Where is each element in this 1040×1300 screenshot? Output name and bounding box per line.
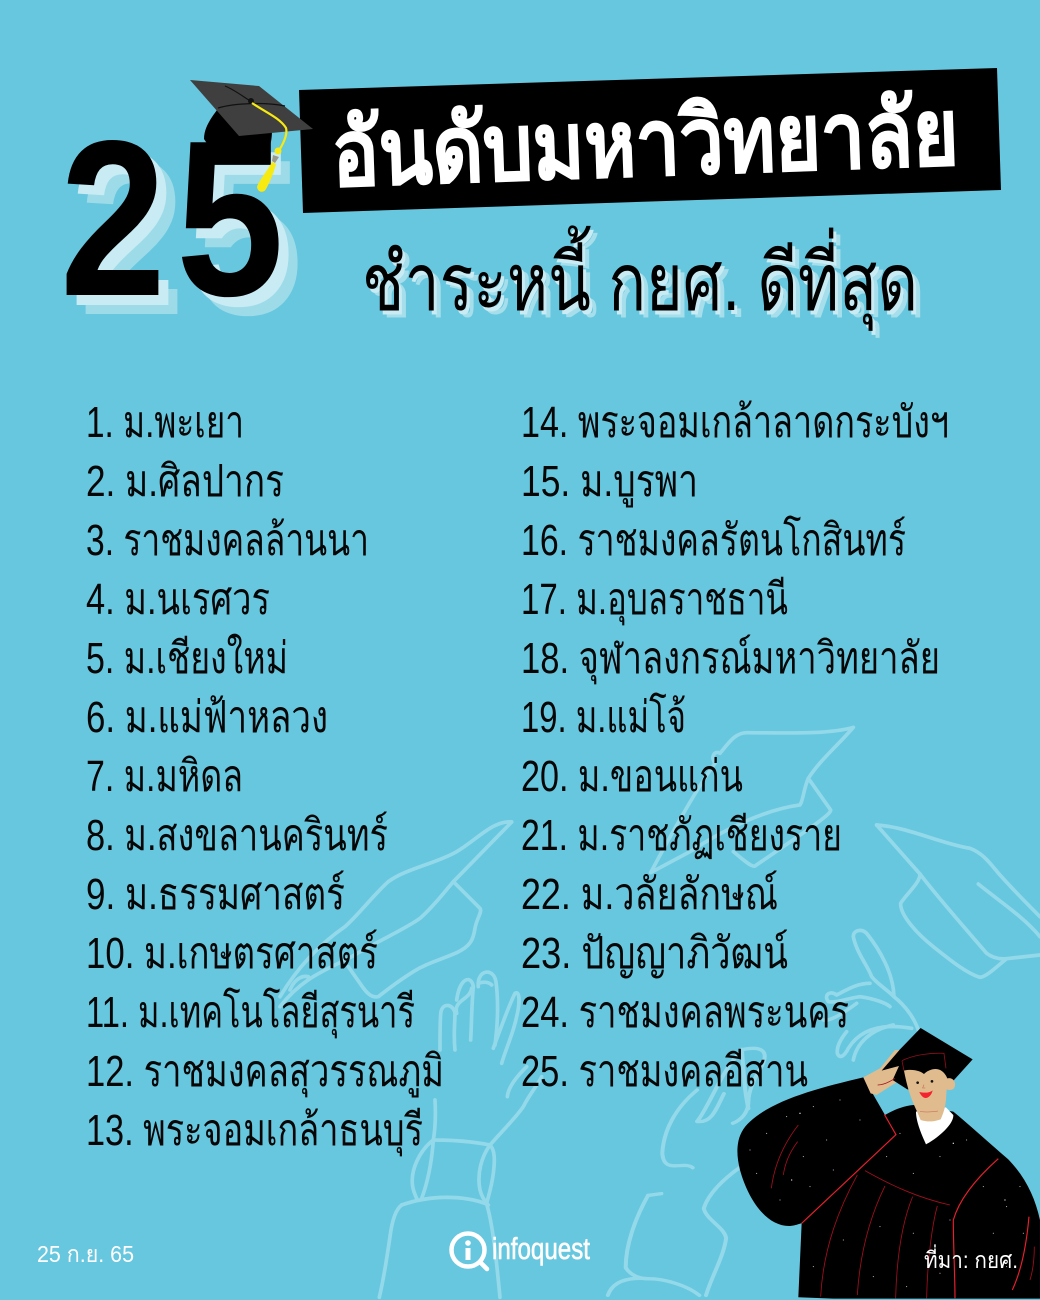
ranking list: left column: 12. ราชมงคลสุวรรณภูมิ	[86, 1047, 444, 1098]
background outline: lower arm right	[608, 1048, 765, 1295]
ranking list: right column	[521, 398, 949, 1096]
ranking list: right column: 19. ม.แม่โจ้	[521, 692, 686, 742]
ranking list: right column: 18. จุฬาลงกรณ์มหาวิทยาลัย	[521, 634, 940, 685]
wordmark: infoquest	[492, 1231, 590, 1266]
ranking list: left column	[86, 398, 444, 1157]
background outline: flying cap centre	[651, 727, 853, 873]
gown red trim lines	[802, 1114, 1029, 1298]
ranking list: right column: 25. ราชมงคลอีสาน	[521, 1047, 808, 1096]
ranking list: right column: 15. ม.บูรพา	[521, 457, 698, 508]
number main: 2	[60, 95, 166, 343]
title banner	[299, 68, 1001, 213]
number shadow far: 5	[195, 114, 303, 362]
ranking list: right column: 20. ม.ขอนแก่น	[521, 752, 743, 801]
logo: infoquest	[452, 1231, 590, 1269]
ranking list: left column: 4. ม.นเรศวร	[86, 575, 270, 624]
collar	[916, 1107, 953, 1144]
source: ที่มา: กยศ.	[924, 1244, 1018, 1273]
ranking list: left column: 11. ม.เทคโนโลยีสุรนารี	[86, 987, 415, 1039]
ranking list: right column: 23. ปัญญาภิวัฒน์	[521, 929, 788, 978]
ranking list: left column: 7. ม.มหิดล	[86, 752, 243, 801]
background outline: flying cap right	[877, 825, 1040, 977]
ranking list: left column: 6. ม.แม่ฟ้าหลวง	[86, 693, 328, 742]
ranking list: left column: 8. ม.สงขลานครินทร์	[86, 811, 388, 860]
hand	[863, 1050, 904, 1095]
face	[904, 1069, 955, 1121]
background outline: raised hand left	[379, 1067, 542, 1297]
ranking list: right column: 16. ราชมงคลรัตนโกสินทร์	[521, 515, 906, 565]
ranking list: left column: 5. ม.เชียงใหม่	[86, 633, 288, 683]
ranking list: left column: 13. พระจอมเกล้าธนบุรี	[86, 1106, 423, 1157]
gown	[737, 1077, 1040, 1299]
number shadow near: 5	[186, 105, 294, 353]
background outline: raised hand right	[823, 930, 918, 1060]
icon: magnifier with i	[452, 1234, 487, 1269]
ranking list: right column: 17. ม.อุบลราชธานี	[521, 575, 788, 626]
number shadow near: 2	[70, 105, 176, 353]
ranking list: left column: 3. ราชมงคลล้านนา	[86, 516, 369, 565]
background outline: flying cap left	[280, 822, 512, 1007]
number 25	[60, 95, 303, 362]
banner background	[299, 68, 1001, 213]
ranking list: left column: 10. ม.เกษตรศาสตร์	[86, 929, 378, 978]
ranking list: right column: 24. ราชมงคลพระนคร	[521, 988, 849, 1037]
ranking list: right column: 21. ม.ราชภัฏเชียงราย	[521, 811, 842, 860]
icon: graduation cap	[190, 80, 313, 192]
number shadow far	[79, 114, 303, 362]
ranking list: left column: 9. ม.ธรรมศาสตร์	[86, 870, 345, 919]
date: 25 ก.ย. 65	[37, 1241, 134, 1267]
gown speckles	[749, 1099, 1024, 1287]
number main	[60, 95, 284, 343]
mortarboard	[882, 1028, 973, 1090]
number main: 5	[176, 95, 284, 343]
subtitle	[362, 225, 925, 338]
illustration: graduate student	[737, 1028, 1040, 1299]
ranking list: left column: 1. ม.พะเยา	[86, 398, 244, 447]
ranking list: right column: 22. ม.วลัยลักษณ์	[521, 870, 778, 919]
number shadow far: 2	[79, 114, 185, 362]
number shadow near	[70, 105, 294, 353]
ranking list: left column: 2. ม.ศิลปากร	[86, 457, 284, 506]
